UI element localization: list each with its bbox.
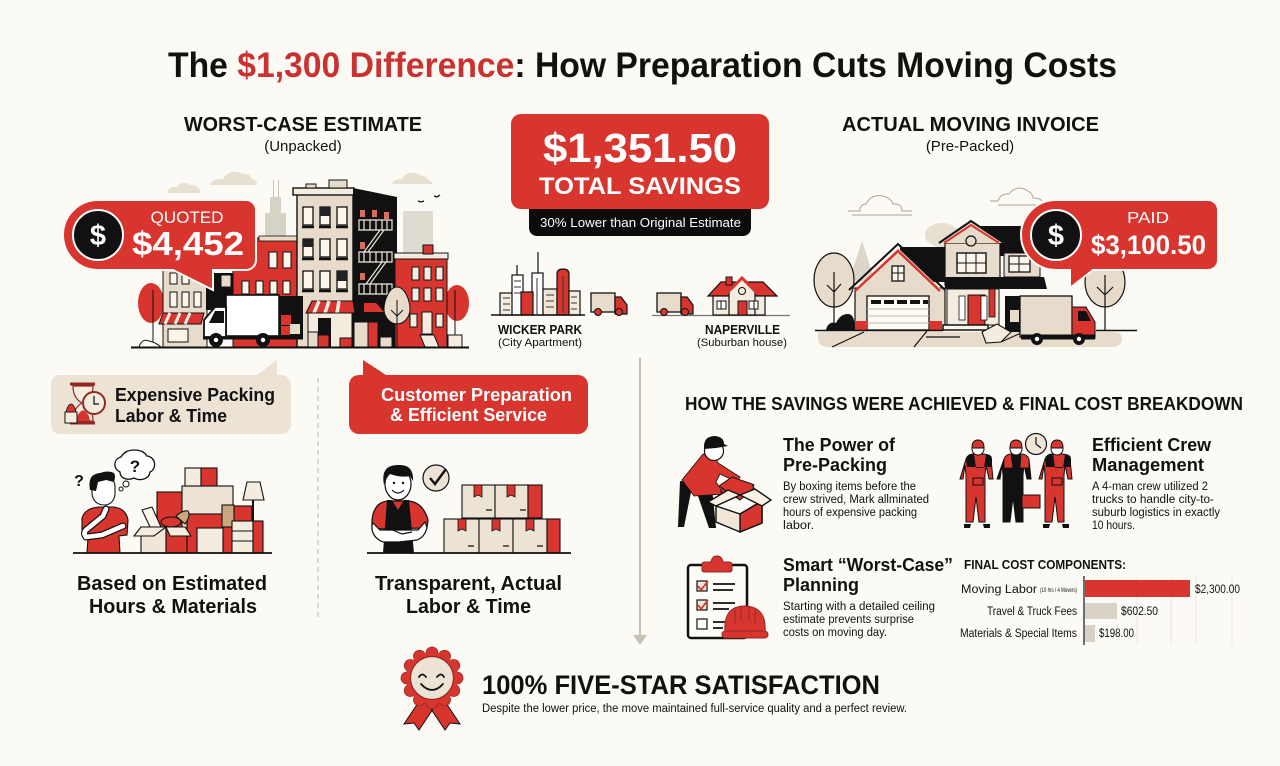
heading: actual invoice: ACTUAL MOVING INVOICE: [842, 114, 1099, 136]
label: Wicker Park: (City Apartment): [498, 337, 582, 349]
text: the power of pre-packing: hours of expensive packing: [783, 507, 917, 519]
text: efficient crew management: Efficient Crew: [1092, 434, 1212, 455]
panel: how the savings were achieved: [678, 394, 1243, 645]
text: satisfaction description: Despite the lower price, the move maintained full-service quality and a perfect review.: [482, 703, 907, 715]
text: the power of pre-packing: labor.: [783, 520, 814, 532]
icon: three crew members and clock: [960, 434, 1072, 528]
title: The $1,300 Difference: How Preparation Cuts Moving Costs: [168, 46, 1117, 85]
heading: actual invoice: (Pre-Packed): [926, 138, 1014, 155]
text: the power of pre-packing: The Power of: [783, 434, 896, 455]
caption: transparent actual labor and time: Labor & Time: [406, 596, 531, 618]
panel: actual moving invoice: [814, 114, 1218, 347]
bar: materials and special items: [960, 625, 1134, 642]
bar: travel and truck fees: $602.50: [1121, 606, 1158, 618]
panel: unpacked cost driver: [51, 360, 291, 618]
illustration: confused person and pile of belongings: ?: [74, 473, 84, 490]
label: Naperville: NAPERVILLE: [705, 323, 780, 337]
icon: hourglass and clock: [65, 384, 105, 423]
text: smart worst-case planning: estimate prevents surprise: [783, 614, 914, 626]
label: Naperville: [697, 323, 787, 349]
callout: quoted price: [63, 200, 256, 290]
caption: based on estimated hours and materials: Based on Estimated: [77, 573, 267, 595]
black strip: percent lower: 30% Lower than Original Estimate: [540, 216, 741, 230]
heading: satisfaction: 100% FIVE-STAR SATISFACTION: [482, 670, 880, 700]
illustration: suburban house with truck: [814, 188, 1137, 347]
text: efficient crew management: A 4-man crew utilized 2: [1092, 481, 1208, 493]
tag: customer preparation and efficient service: [349, 360, 588, 434]
text: smart worst-case planning: Starting with a detailed ceiling: [783, 601, 935, 613]
label: Wicker Park: WICKER PARK: [498, 323, 582, 337]
caption: based on estimated hours and materials: Hours & Materials: [89, 596, 257, 618]
bar: moving labor: Moving Labor: [961, 584, 1037, 596]
savings box: [511, 114, 769, 209]
heading: worst-case estimate: WORST-CASE ESTIMATE: [184, 114, 422, 136]
bar: materials and special items: Materials & Special Items: [960, 628, 1077, 640]
illustration: smiling mover with stacked boxes: [367, 465, 571, 553]
route: Wicker Park city icon and truck: [491, 252, 627, 316]
panel: five-star satisfaction: [401, 647, 907, 730]
black strip: percent lower: [529, 209, 751, 236]
bar: moving labor: $2,300.00: [1195, 584, 1240, 596]
chart: final cost components: [960, 557, 1240, 645]
heading: actual invoice: [842, 114, 1099, 155]
callout: paid price: $3,100.50: [1091, 230, 1206, 260]
label: Naperville: (Suburban house): [697, 337, 787, 349]
bar: materials and special items: $198.00: [1099, 628, 1134, 640]
text: smart worst-case planning: costs on moving day.: [783, 627, 887, 639]
text: the power of pre-packing: [783, 434, 929, 532]
icon: person packing a box: [678, 436, 771, 532]
arrow: center divider: [633, 358, 647, 645]
caption: transparent actual labor and time: Transparent, Actual: [375, 573, 562, 595]
chart heading: FINAL COST COMPONENTS:: [964, 557, 1126, 572]
text: the power of pre-packing: crew strived, Mark allminated: [783, 494, 929, 506]
bar: travel and truck fees: Travel & Truck Fees: [987, 606, 1077, 618]
text: the power of pre-packing: By boxing items before the: [783, 481, 916, 493]
bar: travel and truck fees: [987, 603, 1158, 619]
panel: worst-case estimate: [63, 114, 469, 348]
callout: paid price: [1021, 200, 1218, 288]
bar: moving labor: [961, 580, 1240, 597]
panel: total savings: [491, 114, 790, 349]
text: efficient crew management: 10 hours.: [1092, 520, 1135, 532]
callout: paid price: PAID: [1127, 210, 1169, 227]
callout: paid price: $: [1048, 220, 1064, 252]
savings box: $1,351.50: [543, 125, 737, 171]
text: smart worst-case planning: [783, 554, 953, 639]
text: smart worst-case planning: Smart “Worst-Case”: [783, 554, 953, 575]
tag: customer preparation and efficient service: Customer Preparation: [381, 385, 572, 405]
tag: expensive packing labor: [51, 360, 291, 434]
label: Wicker Park: [498, 323, 582, 349]
route: Naperville house icon and truck: [652, 277, 790, 316]
tag: expensive packing labor: Expensive Packing: [115, 385, 275, 405]
icon: clipboard checklist and hard hat: [688, 556, 768, 638]
callout: quoted price: QUOTED: [150, 208, 224, 227]
section heading: HOW THE SAVINGS WERE ACHIEVED & FINAL COST BREAKDOWN: [685, 394, 1243, 414]
text: efficient crew management: [1092, 434, 1220, 532]
caption: based on estimated hours and materials: [77, 573, 267, 618]
illustration: city street with moving truck: [131, 172, 469, 348]
icon: smiling rosette badge: [401, 647, 463, 730]
text: efficient crew management: Management: [1092, 454, 1204, 475]
heading: worst-case estimate: [184, 114, 422, 155]
callout: quoted price: $4,452: [132, 225, 244, 262]
text: the power of pre-packing: Pre-Packing: [783, 454, 887, 475]
text: efficient crew management: trucks to handle city-to-: [1092, 494, 1214, 506]
tag: expensive packing labor: Labor & Time: [115, 406, 227, 426]
panel: prepared cost driver: [349, 360, 588, 618]
heading: worst-case estimate: (Unpacked): [264, 138, 342, 155]
bar: moving labor: (10 hrs / 4 Movers): [1040, 587, 1077, 594]
illustration: confused person and pile of belongings: ?: [130, 457, 140, 476]
illustration: confused person and pile of belongings: [73, 450, 272, 553]
caption: transparent actual labor and time: [375, 573, 562, 618]
text: efficient crew management: suburb logistics in exactly: [1092, 507, 1220, 519]
tag: customer preparation and efficient service: & Efficient Service: [390, 405, 547, 425]
callout: quoted price: $: [90, 220, 106, 252]
text: smart worst-case planning: Planning: [783, 574, 859, 595]
savings box: TOTAL SAVINGS: [539, 173, 741, 200]
